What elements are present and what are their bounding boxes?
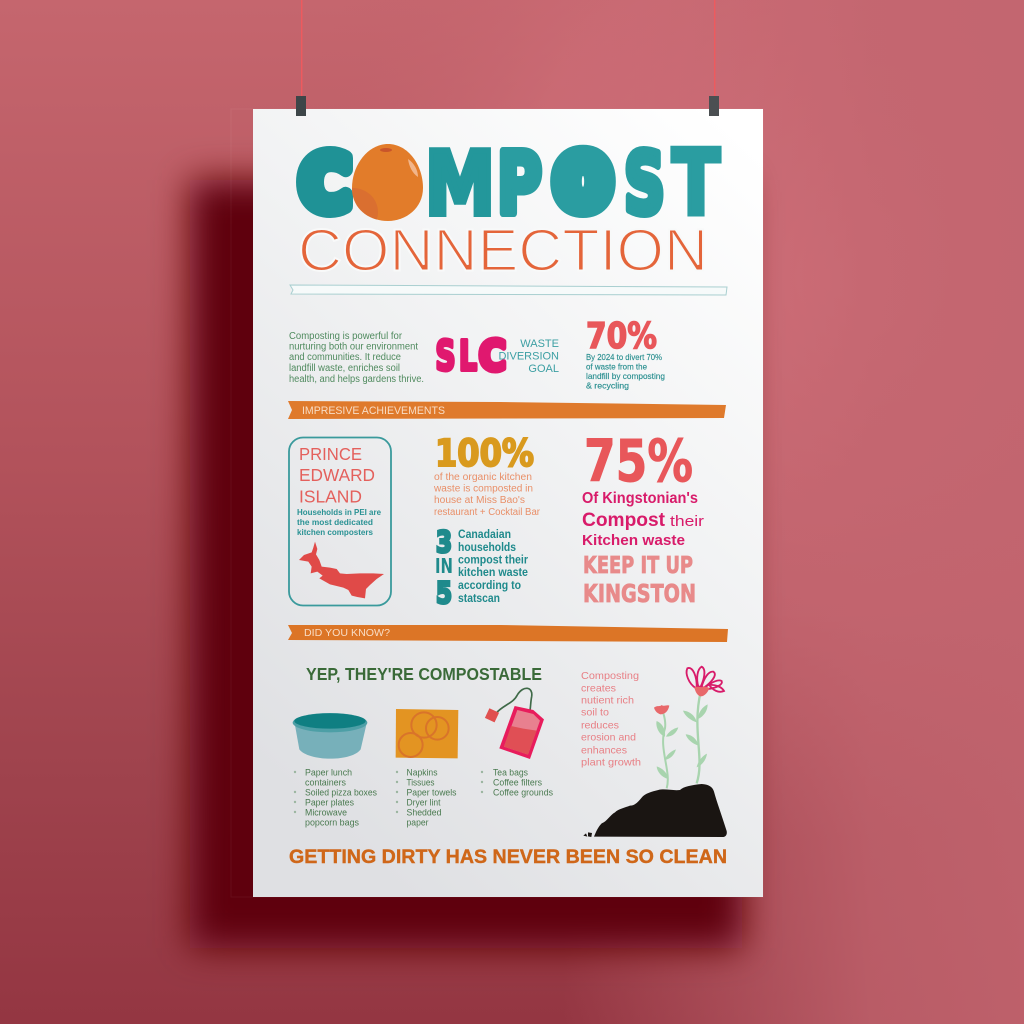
slogan: keep it up Kingston: KEEP IT UP — [583, 553, 693, 579]
70% description: By 2024 to divert 70% — [586, 352, 662, 362]
banner: impressive achievements — [288, 401, 726, 419]
slogan: keep it up Kingston: KINGSTON — [583, 579, 696, 608]
PEI description: kitchen composters — [297, 527, 373, 537]
70% description: & recycling — [586, 380, 629, 390]
text: soil benefits: plant growth — [581, 756, 641, 768]
title: Compost: S — [624, 135, 665, 234]
text: soil benefits: creates — [581, 682, 616, 694]
list: paper products: Paper lunch — [305, 768, 352, 778]
list: tea and coffee: Tea bags — [493, 768, 528, 778]
list: napkins and tissues: Tissues — [406, 778, 435, 788]
small flower — [654, 705, 669, 714]
intro text: and communities. It reduce — [289, 352, 401, 363]
stat: 3 in 5 numerals: IN — [435, 554, 453, 578]
70% description: of waste from the — [586, 362, 647, 372]
panel: Prince Edward Island — [289, 438, 391, 606]
text: soil benefits: nutient rich — [581, 694, 634, 706]
PEI heading: EDWARD — [299, 465, 375, 485]
PEI heading — [299, 444, 375, 506]
title: Compost: T — [672, 131, 720, 236]
list: napkins and tissues: Napkins — [406, 768, 438, 778]
text: soil benefits — [581, 670, 641, 768]
stat: 100%: 100% — [435, 432, 534, 475]
big flower petals — [687, 667, 724, 692]
map: Prince Edward Island — [299, 542, 384, 598]
waste diversion goal: WASTE — [520, 338, 559, 350]
stat: 70%: 70% — [586, 316, 657, 357]
intro text: health, and helps gardens thrive. — [289, 374, 424, 385]
banner: did you know: DID YOU KNOW? — [304, 627, 390, 639]
Kingstonian statement: Compost — [582, 510, 666, 531]
SLC wordmark: L — [459, 332, 477, 380]
list: napkins and tissues: Paper towels — [406, 788, 457, 798]
PEI description: Households in PEI are — [297, 507, 381, 517]
title: Compost: O — [360, 141, 412, 225]
title: Compost: O — [557, 144, 609, 223]
list: napkins and tissues: Dryer lint — [406, 798, 441, 808]
stat: 75%: 75% — [584, 427, 693, 495]
list: napkins and tissues: paper — [406, 818, 429, 828]
waste diversion goal — [498, 338, 559, 375]
poster shadow — [190, 180, 742, 948]
PEI heading: PRINCE — [299, 444, 362, 464]
list: paper products: Microwave — [305, 808, 347, 818]
poster sheet — [253, 109, 763, 897]
SLC wordmark: C — [479, 332, 506, 380]
title: Compost: C — [300, 141, 350, 227]
hanging cord right — [714, 0, 715, 97]
list: tea and coffee: Coffee filters — [493, 778, 542, 788]
title: Compost: P — [497, 135, 542, 234]
list: paper products: containers — [305, 778, 346, 788]
hanging cord left — [301, 0, 302, 97]
stat: 3 in 5 numerals — [435, 525, 453, 610]
big flower centre — [694, 686, 709, 696]
list: napkins and tissues — [396, 768, 457, 828]
text: soil benefits: reduces — [581, 720, 619, 732]
PEI description — [297, 507, 381, 537]
text: soil benefits: erosion and — [581, 732, 636, 744]
3 in 5 description: households — [458, 542, 516, 554]
text: soil benefits: enhances — [581, 744, 627, 756]
stat: 3 in 5 numerals: 5 — [436, 576, 452, 610]
list: tea and coffee: Coffee grounds — [493, 788, 553, 798]
icon: orange — [352, 144, 423, 221]
3 in 5 description: compost their — [458, 554, 528, 566]
banner: did you know — [288, 625, 728, 642]
soil mound — [594, 784, 727, 837]
100% description: restaurant + Cocktail Bar — [434, 507, 541, 518]
divider ribbon — [290, 285, 727, 295]
clip right — [709, 96, 719, 116]
list: paper products — [294, 768, 377, 828]
intro text: Composting is powerful for — [289, 331, 403, 342]
list: paper products: Paper plates — [305, 798, 354, 808]
Kingstonian statement: their — [670, 513, 704, 530]
plant stems and leaves — [656, 692, 708, 788]
intro text: nurturing both our environment — [289, 342, 418, 352]
title: Compost: M — [425, 133, 495, 235]
SLC wordmark: S — [436, 332, 456, 380]
transparent sheet edge — [231, 109, 763, 897]
100% description: house at Miss Bao's — [434, 495, 525, 506]
100% description: waste is composted in — [433, 484, 533, 494]
closing tagline: GETTING DIRTY HAS NEVER BEEN SO CLEAN — [289, 846, 727, 868]
3 in 5 description: kitchen waste — [458, 567, 528, 579]
banner: impressive achievements: IMPRESIVE ACHIEVEMENTS — [302, 405, 445, 417]
3 in 5 description: statscan — [458, 593, 500, 605]
Kingstonian statement: Of Kingstonian's — [582, 490, 698, 507]
intro text: landfill waste, enriches soil — [289, 363, 400, 374]
title: Compost — [300, 131, 720, 236]
text: soil benefits: Composting — [581, 670, 639, 682]
70% description: landfill by composting — [586, 371, 665, 381]
soil crumbs — [583, 832, 592, 837]
illustration: plants growing from soil — [583, 667, 727, 837]
intro text — [289, 331, 424, 385]
stat: 3 in 5 numerals: 3 — [436, 525, 452, 559]
list: napkins and tissues: Shedded — [406, 808, 442, 818]
3 in 5 description: according to — [458, 580, 521, 592]
3 in 5 description — [458, 529, 528, 605]
waste diversion goal: GOAL — [528, 363, 559, 375]
list: paper products: Soiled pizza boxes — [305, 788, 377, 798]
icon: napkin — [396, 709, 458, 758]
heading: compostable: YEP, THEY'RE COMPOSTABLE — [306, 664, 542, 684]
3 in 5 description: Canadaian — [458, 529, 511, 541]
waste diversion goal: DIVERSION — [498, 350, 559, 362]
PEI description: the most dedicated — [297, 517, 373, 527]
icon: paper bowl — [293, 713, 367, 759]
70% description — [586, 352, 665, 390]
PEI heading: ISLAND — [299, 486, 362, 506]
100% description: of the organic kitchen — [434, 472, 532, 483]
SLC wordmark — [436, 332, 506, 380]
list: tea and coffee — [481, 768, 553, 798]
title: Connection: CONNECTION — [298, 218, 708, 284]
Kingstonian statement: Kitchen waste — [582, 532, 685, 549]
icon: tea bag — [485, 688, 544, 759]
100% description — [433, 472, 541, 518]
Kingstonian statement — [582, 490, 704, 549]
list: paper products: popcorn bags — [305, 818, 359, 828]
clip left — [296, 96, 306, 116]
slogan: keep it up Kingston — [583, 553, 696, 608]
text: soil benefits: soil to — [581, 706, 609, 718]
